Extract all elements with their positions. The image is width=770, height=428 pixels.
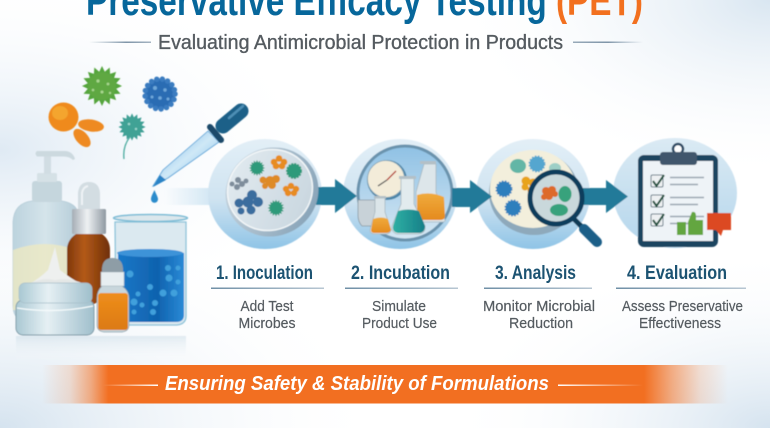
icon: microbes cluster <box>48 66 175 159</box>
banner: Ensuring Safety & Stability of Formulations <box>165 373 549 395</box>
microbe: green bottom <box>268 200 284 216</box>
microbe: blue bottom <box>506 200 520 216</box>
microbe: orange centre <box>260 175 280 189</box>
microbe: blue top <box>530 156 544 172</box>
icon: cream jar <box>16 247 94 335</box>
step 4 label: Effectiveness <box>639 315 721 332</box>
icon: pump bottle <box>13 151 78 320</box>
banner <box>35 365 735 404</box>
icon: orange yeast microbe <box>48 102 105 150</box>
microbe: orange right <box>283 183 299 196</box>
step 3 label <box>483 263 595 332</box>
step 2 label <box>345 263 458 332</box>
step 4 label: 4. Evaluation <box>627 263 727 284</box>
step 4 label: Assess Preservative <box>622 298 743 315</box>
icon: green spiky microbe <box>82 66 122 106</box>
icon: amber flask back <box>416 161 445 222</box>
microbe: green top <box>249 160 265 176</box>
reflection <box>16 336 186 362</box>
icon: amber dropper bottle <box>67 182 110 307</box>
step 1 label <box>211 263 324 332</box>
products group <box>13 151 188 362</box>
icon: small amber flask <box>370 196 391 234</box>
step 3 illustration: analysis dish <box>489 150 579 235</box>
icon: teal flask <box>392 176 425 234</box>
step 3 label: Monitor Microbial <box>483 298 595 315</box>
microbe: grey <box>230 177 248 190</box>
icon: small orange bottle <box>97 258 129 332</box>
icon: blue microbe <box>145 79 175 109</box>
icon: water drop <box>151 190 158 203</box>
flow band <box>165 188 215 205</box>
step 2 label: Product Use <box>362 315 437 332</box>
icon: clock <box>367 160 407 200</box>
checklist rows <box>651 175 704 226</box>
microbe: blue large <box>234 190 263 214</box>
step halos <box>208 138 737 249</box>
step 2 label: 2. Incubation <box>351 263 450 284</box>
microbe: teal left <box>510 159 526 173</box>
icon: small beaker <box>358 200 375 226</box>
step 3 label: 3. Analysis <box>495 263 576 284</box>
icon: teal microbe <box>118 113 146 159</box>
subtitle: Evaluating Antimicrobial Protection in Products <box>158 32 563 54</box>
step 4 label <box>616 263 746 332</box>
icon: thumbs up <box>677 212 703 235</box>
step 3 label: Reduction <box>509 315 573 332</box>
icon: dropper <box>151 106 243 203</box>
microbe: teal right <box>549 163 561 173</box>
icon: blue liquid beaker <box>114 214 188 325</box>
step 1 label: Add Test <box>240 298 294 315</box>
step 1 label: Microbes <box>238 315 296 332</box>
microbe: orange top <box>271 155 287 169</box>
icon: red speech badge <box>707 213 731 236</box>
microbe: yellow <box>522 176 538 194</box>
arrow: step 3 to 4 <box>575 180 628 213</box>
step 4 illustration: clipboard <box>638 144 731 247</box>
arrow: step 1 to 2 <box>316 179 357 213</box>
icon: magnifier <box>530 172 597 242</box>
step 1 illustration: petri dish <box>211 132 333 252</box>
step 2 illustration: flasks and clock <box>358 146 452 240</box>
step 1 label: 1. Inoculation <box>216 263 313 284</box>
arrow: step 2 to 3 <box>452 180 492 213</box>
microbe: blue left <box>496 182 512 196</box>
microbe: green right <box>287 164 301 178</box>
step 2 label: Simulate <box>372 298 426 315</box>
